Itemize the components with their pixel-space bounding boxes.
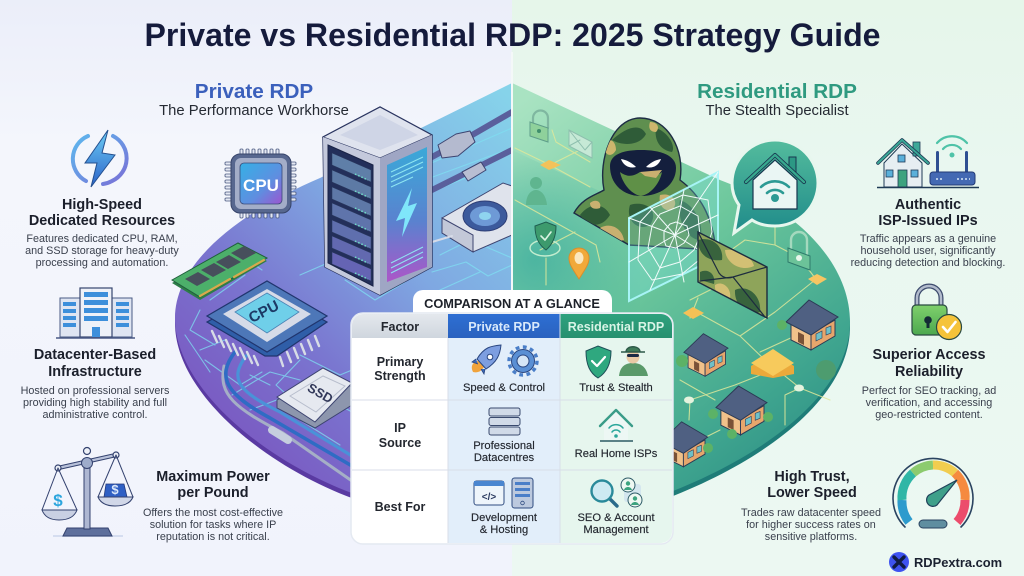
text: Development & Hosting: Development <box>471 512 538 524</box>
icon: code window: </> <box>482 492 496 503</box>
icon: small envelope <box>569 130 592 158</box>
icon: account avatars <box>621 478 642 507</box>
icon: home wi-fi speech bubble <box>732 140 818 233</box>
icon: code window <box>474 481 504 505</box>
text: SEO & Account Management: SEO & Account <box>577 512 655 524</box>
icon: secondary padlock <box>788 232 810 270</box>
panel: residential isometric disc <box>512 83 850 535</box>
text: Development & Hosting: & Hosting <box>480 524 528 536</box>
heading: Residential RDP <box>697 80 857 119</box>
icon: house A <box>786 300 838 350</box>
text: Maximum Power per Pound <box>143 469 283 543</box>
icon: orange node <box>808 274 827 285</box>
icon: balance scale: $ <box>111 482 119 497</box>
text: High Trust, Lower Speed <box>741 469 881 543</box>
icon: house B <box>684 334 728 376</box>
text: Superior Access Reliability: Superior Access <box>872 347 986 363</box>
logo: RDPextra: RDPextra.com <box>914 555 1002 570</box>
icon: server box <box>512 478 533 508</box>
text: Authentic ISP-Issued IPs: Traffic appears as a genuine <box>860 233 996 245</box>
table header labels: Factor <box>381 320 419 334</box>
icon: golden hub <box>751 349 794 378</box>
title: Private vs Residential RDP: 2025 Strategy Guide <box>144 17 880 53</box>
text: SEO & Account Management <box>577 512 655 536</box>
network traces: residential <box>515 130 830 445</box>
table body <box>351 313 673 544</box>
text: High Trust, Lower Speed: High Trust, <box>774 469 850 485</box>
text: Superior Access Reliability: verification, and accessing <box>866 397 992 409</box>
row label: IP Source <box>379 421 421 450</box>
icon: CPU processor <box>207 281 327 366</box>
icon: datacenter building <box>56 288 135 338</box>
text: High-Speed Dedicated Resources: Dedicated Resources <box>29 213 175 229</box>
text: High-Speed Dedicated Resources: and SSD storage for heavy-duty <box>25 245 179 257</box>
text: Datacenter-Based Infrastructure: administrative control. <box>42 409 148 421</box>
icon: SSD drive <box>277 368 352 428</box>
text: High Trust, Lower Speed: Trades raw datacenter speed <box>741 507 881 519</box>
icon: orange node <box>540 160 561 170</box>
table heading tab <box>413 290 612 316</box>
table heading tab: COMPARISON AT A GLANCE <box>424 296 600 311</box>
text: Speed & Control: Speed & Control <box>463 382 545 394</box>
icon: spy figure <box>619 347 648 376</box>
text: High-Speed Dedicated Resources: processing and automation. <box>36 257 168 269</box>
text: Professional Datacentres <box>473 440 535 464</box>
icon: magnifying glass <box>592 480 617 506</box>
icon: house D <box>661 422 708 467</box>
icon: camouflage hooded figure <box>574 118 716 250</box>
heading: Residential RDP: Residential RDP <box>697 80 857 103</box>
icon: camouflage envelope <box>698 232 767 318</box>
icon: balance scale: $ <box>53 491 63 510</box>
network nodes <box>684 384 804 404</box>
text: Real Home ISPs: Real Home ISPs <box>575 448 658 460</box>
row label: Primary Strength: Primary <box>377 355 423 369</box>
row label: Best For: Best For <box>375 500 425 514</box>
heading: Private RDP <box>159 80 349 119</box>
icon: fan unit <box>432 183 512 252</box>
text: Professional Datacentres: Professional <box>473 440 535 452</box>
panel: private isometric disc <box>172 83 512 535</box>
icon: padlock with check <box>912 286 962 340</box>
icon: CPU chip <box>225 149 296 218</box>
text: Maximum Power per Pound: solution for tasks where IP <box>150 519 276 531</box>
icon: SSD drive: SSD <box>305 380 336 406</box>
text: Maximum Power per Pound: Maximum Power <box>156 469 270 485</box>
icon: glowing spider web panel <box>629 172 718 301</box>
text: High Trust, Lower Speed: for higher success rates on <box>746 519 876 531</box>
text: Maximum Power per Pound: per Pound <box>177 485 249 501</box>
icon: house C <box>716 386 767 435</box>
table header labels: Residential RDP <box>568 320 664 334</box>
text: Superior Access Reliability: geo-restricted content. <box>875 409 983 421</box>
text: High-Speed Dedicated Resources: High-Speed <box>62 197 142 213</box>
row label: IP Source: Source <box>379 436 421 450</box>
icon: RAM module <box>172 243 267 300</box>
text: High-Speed Dedicated Resources: Features dedicated CPU, RAM, <box>26 233 178 245</box>
cables: CPU to table <box>223 352 352 481</box>
background: residential side <box>512 0 1024 576</box>
text: Professional Datacentres: Datacentres <box>474 452 535 464</box>
text: Datacenter-Based Infrastructure: Infrastructure <box>48 364 142 380</box>
heading: Private RDP: Private RDP <box>195 80 313 103</box>
text: Authentic ISP-Issued IPs: household user, significantly <box>860 245 996 257</box>
icon: location pin <box>569 248 589 279</box>
text: Maximum Power per Pound: reputation is not critical. <box>156 531 270 543</box>
cables: upper right <box>432 112 512 190</box>
icon: small shield <box>530 222 560 256</box>
row label: Primary Strength <box>374 355 426 383</box>
panel: comparison table <box>351 290 673 544</box>
text: SEO & Account Management: Management <box>583 524 650 536</box>
icon: orange node bottom <box>683 307 704 319</box>
heading: Residential RDP: The Stealth Specialist <box>705 103 849 119</box>
table header labels <box>381 320 664 334</box>
circuit traces: private <box>185 128 512 445</box>
text: Superior Access Reliability: Reliability <box>895 364 963 380</box>
text: Datacenter-Based Infrastructure: Datacenter-Based <box>34 347 156 363</box>
text: Superior Access Reliability <box>862 347 996 421</box>
icon: green shield <box>586 346 611 378</box>
icon: home wi-fi <box>600 410 633 441</box>
center divider <box>511 52 513 292</box>
text: Maximum Power per Pound: Offers the most cost-effective <box>143 507 283 519</box>
icon: server stack <box>489 408 520 435</box>
icon: trees <box>676 320 836 453</box>
heading: Private RDP: The Performance Workhorse <box>159 103 349 119</box>
icon: lightning bolt <box>73 130 127 187</box>
background: private side <box>0 0 512 576</box>
text: Authentic ISP-Issued IPs: Authentic <box>895 197 961 213</box>
icon: CPU processor: CPU <box>246 297 282 327</box>
icon: rocket <box>472 345 501 374</box>
text: Datacenter-Based Infrastructure: Hosted on professional servers <box>21 385 170 397</box>
text: Trust & Stealth: Trust & Stealth <box>579 382 653 394</box>
icon: CPU chip: CPU <box>243 176 279 195</box>
logo: RDPextra <box>889 552 1002 572</box>
text: Authentic ISP-Issued IPs <box>851 197 1005 269</box>
text: High Trust, Lower Speed: sensitive platforms. <box>765 531 857 543</box>
icon: speed gauge <box>893 458 973 528</box>
icon: server tower <box>323 107 432 295</box>
text: Development & Hosting <box>471 512 538 536</box>
row label: Primary Strength: Strength <box>374 369 426 383</box>
text: High-Speed Dedicated Resources <box>25 197 179 269</box>
icon: person silhouette <box>526 177 547 205</box>
text: Authentic ISP-Issued IPs: ISP-Issued IPs <box>878 213 978 229</box>
row label: IP Source: IP <box>394 421 406 435</box>
icon: gear <box>509 347 537 375</box>
text: High Trust, Lower Speed: Lower Speed <box>767 485 857 501</box>
icon: balance scale <box>42 448 133 536</box>
text: Authentic ISP-Issued IPs: reducing detection and blocking. <box>851 257 1005 269</box>
icon: house with router <box>877 136 979 188</box>
text: Datacenter-Based Infrastructure: providing high stability and full <box>23 397 167 409</box>
text: Superior Access Reliability: Perfect for SEO tracking, ad <box>862 385 996 397</box>
table header labels: Private RDP <box>468 320 540 334</box>
text: Datacenter-Based Infrastructure <box>21 347 170 421</box>
icon: small padlock <box>530 111 548 142</box>
